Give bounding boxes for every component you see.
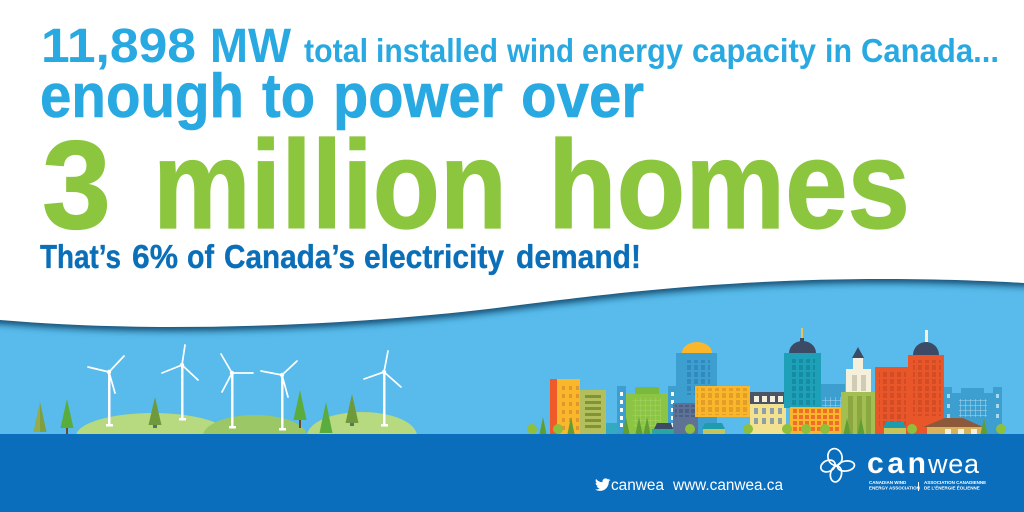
subhead: electricity demand: That’s (40, 238, 121, 275)
domed blue tower (676, 342, 717, 434)
footer band (0, 434, 1024, 512)
headline: enough to power over: to (262, 62, 315, 131)
logo wordmark (867, 447, 980, 480)
turbine 4 (261, 361, 297, 430)
headline: installed capacity: capacity (692, 32, 817, 69)
headline: enough to power over: power (333, 62, 503, 131)
orange towers (875, 330, 944, 434)
turbine 1 (88, 356, 124, 426)
logo wordmark: can (867, 447, 926, 480)
blue right block (944, 387, 1002, 434)
slate building (673, 403, 698, 434)
logo tagline french: DE L’ÉNERGIE ÉOLIENNE (924, 484, 980, 490)
teal domed tower (784, 328, 821, 408)
amber block (695, 386, 750, 417)
headline: 3 million homes: 3 (42, 116, 111, 255)
wind turbines (88, 345, 401, 430)
turbine 3 (221, 354, 253, 428)
twitter bird icon (595, 478, 610, 491)
white wave header panel (0, 0, 1024, 327)
headline: 3 million homes (42, 116, 910, 255)
subhead: electricity demand: Canada’s (224, 238, 355, 275)
headline: installed capacity: total (304, 32, 368, 69)
headline: installed capacity: installed (376, 32, 498, 69)
logo tagline french: ASSOCIATION CANADIENNE (924, 480, 986, 485)
trees near turbines (34, 390, 358, 434)
turbine 5 (364, 351, 401, 426)
twitter handle: canwea (611, 477, 664, 494)
headline: enough to power over: enough (40, 62, 244, 131)
orange and yellow building (550, 379, 580, 434)
subhead: electricity demand (40, 238, 641, 275)
subhead: electricity demand: electricity (364, 238, 505, 275)
blue and green block (617, 386, 677, 434)
headline: 3 million homes: homes (548, 116, 910, 255)
orange low block (790, 407, 849, 434)
hills (76, 412, 417, 460)
canwea logo (819, 447, 986, 491)
logo divider (918, 482, 919, 491)
subhead: electricity demand: 6% (132, 238, 178, 275)
headline: installed capacity: wind (506, 32, 574, 69)
olive building (580, 390, 606, 434)
teal low block (606, 423, 618, 434)
turbine 2 (162, 345, 198, 420)
cream townhouse (750, 392, 786, 434)
wave shadow (0, 204, 1024, 331)
logo flower icon (819, 447, 855, 483)
headline: enough to power over: over (521, 62, 644, 131)
logo tagline english: CANADIAN WIND (869, 480, 906, 485)
headline: installed capacity: energy (582, 32, 684, 69)
city skyline (527, 328, 1006, 434)
pale blue back block (821, 384, 845, 414)
subhead: electricity demand: of (187, 238, 215, 275)
sky background (0, 270, 1024, 440)
small teal-roof houses (652, 422, 906, 434)
headline: installed capacity: 11,898 (41, 20, 196, 73)
website url: www.canwea.ca (672, 477, 783, 494)
subhead: electricity demand: demand! (516, 238, 641, 275)
logo wordmark: wea (927, 449, 980, 479)
green column building (841, 392, 876, 434)
headline: installed capacity: Canada... (861, 32, 999, 69)
headline: installed capacity (41, 20, 999, 73)
headline: installed capacity: in (825, 32, 852, 69)
white clock tower (846, 347, 871, 392)
headline: installed capacity: MW (210, 20, 292, 73)
headline: enough to power over (40, 62, 644, 131)
headline: 3 million homes: million (153, 116, 507, 255)
logo tagline english: ENERGY ASSOCIATION (869, 486, 920, 490)
tan house (923, 418, 983, 434)
street trees (527, 417, 1006, 434)
